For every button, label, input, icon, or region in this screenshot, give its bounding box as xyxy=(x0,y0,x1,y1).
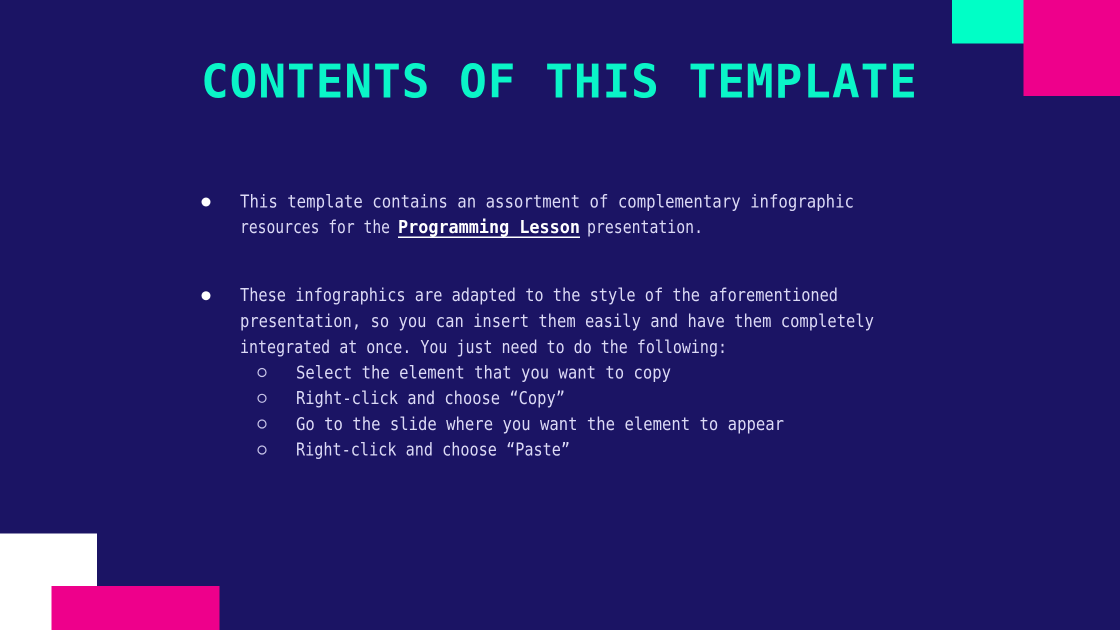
decoration: top right teal square xyxy=(952,0,1024,44)
step 3: Go to the slide where you want the element to appear xyxy=(296,414,784,435)
sub-bullet marker xyxy=(258,446,266,454)
second bullet line 3: integrated at once. You just need to do the following: xyxy=(240,337,727,358)
text block: second bullet xyxy=(202,285,874,358)
sub-bullet marker xyxy=(258,394,266,402)
decoration: bottom left pink bar xyxy=(52,586,220,630)
step 2: Right-click and choose “Copy” xyxy=(296,388,565,409)
bullet marker xyxy=(202,291,210,300)
first bullet line 2 end: presentation. xyxy=(587,217,703,238)
first bullet line 2: resources for the xyxy=(240,217,390,238)
step 1: Select the element that you want to copy xyxy=(296,362,671,383)
list: copy and paste steps xyxy=(258,362,784,460)
decoration: top right pink square xyxy=(1024,0,1120,96)
bullet marker xyxy=(202,198,210,206)
step 4: Right-click and choose “Paste” xyxy=(296,440,570,460)
second bullet line 1: These infographics are adapted to the style of the aforementioned xyxy=(240,285,838,306)
second bullet line 2: presentation, so you can insert them easily and have them completely xyxy=(240,311,874,332)
sub-bullet marker xyxy=(258,420,266,428)
sub-bullet marker xyxy=(258,368,266,376)
decoration: bottom left white square xyxy=(0,534,97,630)
link: Programming Lesson: Programming Lesson xyxy=(398,217,580,238)
first bullet line 1: This template contains an assortment of complementary infographic xyxy=(240,191,854,212)
text block: first bullet xyxy=(202,191,854,238)
title: CONTENTS OF THIS TEMPLATE xyxy=(201,54,917,108)
